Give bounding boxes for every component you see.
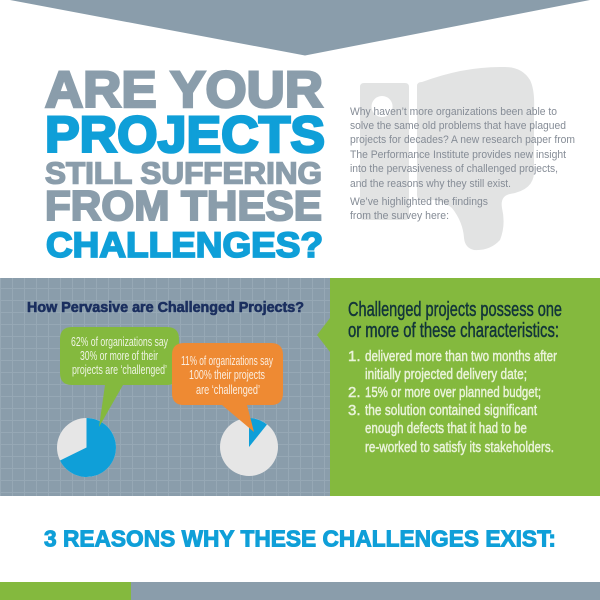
intro paragraph: solve the same old problems that have plagued <box>350 120 566 132</box>
characteristics list: 1. <box>348 348 361 365</box>
callout: 11 percent: 100% their projects <box>189 367 265 382</box>
characteristics list <box>348 348 557 456</box>
callout: 11 percent: 11% of organizations say <box>181 353 273 368</box>
pie chart: 62 percent <box>57 418 116 477</box>
title line: still suffering: STILL SUFFERING <box>45 156 322 190</box>
callout: 11 percent: are ‘challenged’ <box>196 382 260 397</box>
characteristics heading <box>348 299 562 342</box>
thumb icon: cuff <box>360 83 409 220</box>
intro paragraph: and the reasons why they still exist. <box>350 178 511 190</box>
callout: 62 percent: 62% of organizations say <box>71 334 168 349</box>
intro paragraph: Why haven’t more organizations been able to <box>350 106 557 118</box>
characteristics list: 15% or more over planned budget; <box>365 384 541 401</box>
intro paragraph <box>350 106 575 190</box>
intro text <box>350 106 575 222</box>
thumb icon: hand <box>417 67 534 250</box>
intro follow-up: from the survey here: <box>350 210 449 222</box>
panel: characteristics <box>317 278 600 496</box>
intro follow-up <box>350 196 488 222</box>
title line: from these: FROM THESE <box>45 182 322 229</box>
callout: 62 percent <box>60 327 179 427</box>
pie chart: 11 percent <box>220 418 278 476</box>
callout: 62 percent: projects are ‘challenged’ <box>72 362 167 377</box>
title line: are your: ARE YOUR <box>45 61 323 118</box>
characteristics list: 3. <box>348 402 361 419</box>
characteristics list: enough defects that it had to be <box>365 420 527 437</box>
bottom bar <box>0 582 600 600</box>
title line: challenges: CHALLENGES? <box>46 226 323 265</box>
panel heading: How Pervasive are Challenged Projects? <box>27 300 304 316</box>
panel: how pervasive <box>0 278 331 496</box>
callout: 62 percent: 30% or more of their <box>80 348 158 363</box>
icon: thumbs down <box>360 67 534 250</box>
top banner chevron <box>10 0 590 56</box>
characteristics list: the solution contained significant <box>365 402 538 419</box>
characteristics list: initially projected delivery date; <box>365 366 527 383</box>
intro follow-up: We’ve highlighted the findings <box>350 196 488 208</box>
title <box>45 61 325 265</box>
intro paragraph: into the pervasiveness of challenged projects, <box>350 163 558 175</box>
intro paragraph: projects for decades? A new research paper from <box>350 134 575 146</box>
characteristics list: 2. <box>348 384 361 401</box>
intro paragraph: The Performance Institute provides new insight <box>350 149 566 161</box>
callout: 11 percent <box>172 343 283 432</box>
title line: projects: PROJECTS <box>45 106 325 163</box>
section heading: 3 reasons: 3 REASONS WHY THESE CHALLENGES EXIST: <box>44 526 556 552</box>
